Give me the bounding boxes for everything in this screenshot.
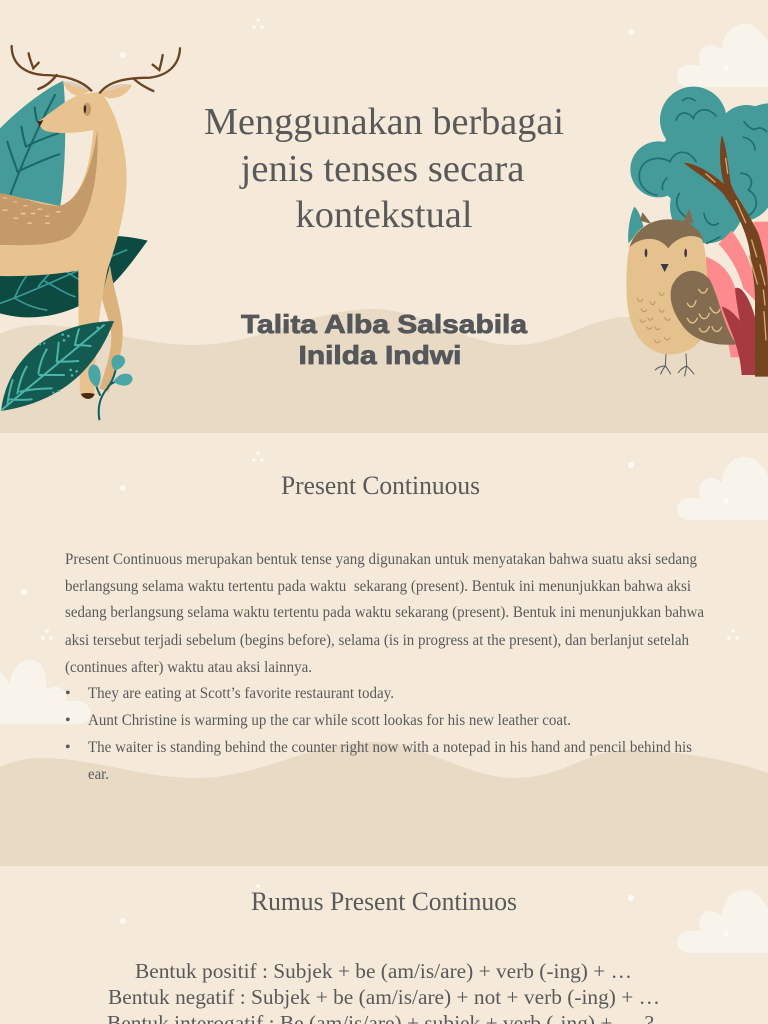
deer nose	[37, 120, 43, 127]
cloud: slide 1 right	[677, 24, 768, 87]
authors: Talita Alba Salsabila	[241, 309, 528, 339]
illustration: tree and owl	[626, 87, 768, 377]
text block: definition: (continues after) waktu atau aksi lainnya.	[65, 659, 312, 676]
pink plant	[706, 222, 768, 357]
owl legs	[655, 353, 694, 376]
icon: front leaf	[1, 321, 114, 411]
text block: definition	[65, 551, 704, 676]
deer eye	[83, 103, 91, 116]
text block: formulas: Bentuk negatif : Subjek + be (am/is/are) + not + verb (-ing) + …	[108, 985, 660, 1009]
owl feathers	[687, 288, 722, 332]
text block: example bullets: ear.	[88, 766, 109, 783]
text block: example bullets: They are eating at Scott’s favorite restaurant today.	[88, 685, 394, 702]
owl wing	[671, 271, 737, 345]
deer body	[0, 92, 127, 393]
text block: example bullets	[65, 685, 692, 783]
authors: Inilda Indwi	[298, 340, 462, 370]
cloud: slide 3 right	[677, 890, 768, 953]
title: jenis tenses secara	[238, 148, 525, 190]
text block: definition: Present Continuous merupakan bentuk tense yang digunakan untuk menyatakan bahwa suatu aksi sedang	[65, 551, 697, 568]
title: kontekstual	[296, 194, 472, 236]
tree foliage	[628, 87, 768, 243]
cloud: slide 2 right	[677, 457, 768, 520]
hill: slide 1	[0, 309, 768, 433]
deer hoof	[81, 393, 95, 399]
deer antlers	[12, 46, 180, 93]
illustration: deer with leaves	[0, 46, 180, 419]
heading: Rumus Present Continuos: Rumus Present Continuos	[251, 886, 517, 916]
title	[204, 101, 564, 236]
red plant	[722, 288, 760, 375]
icon: teal leaf	[0, 81, 65, 208]
icon: dark leaf	[0, 236, 148, 317]
title: Menggunakan berbagai	[204, 101, 564, 143]
text block: example bullets: •	[65, 712, 71, 729]
authors	[241, 309, 528, 370]
cloud: slide 2 left	[0, 660, 91, 724]
hill: slide 2	[0, 742, 768, 866]
text block: example bullets: Aunt Christine is warming up the car while scott lookas for his new leather coat.	[88, 712, 571, 729]
owl ear tufts	[640, 208, 693, 224]
text block: definition: aksi tersebut terjadi sebelum (begins before), selama (is in progress at the present), dan berlanjut setelah	[65, 632, 689, 649]
text block: example bullets: •	[65, 685, 71, 702]
deer back leg	[99, 265, 123, 392]
text block: example bullets: The waiter is standing behind the counter right now with a notepad in his hand and pencil behind his	[88, 739, 692, 756]
text block: example bullets: •	[65, 739, 71, 756]
deer saddle and spots	[0, 130, 98, 245]
owl body	[626, 219, 709, 354]
owl eyes and beak	[645, 249, 687, 272]
deer ears	[63, 81, 132, 98]
owl head cap	[629, 219, 704, 248]
text block: formulas: Bentuk positif : Subjek + be (am/is/are) + verb (-ing) + …	[135, 959, 632, 983]
icon: small sprig	[88, 355, 133, 419]
heading: Present Continuous: Present Continuous	[281, 470, 480, 500]
foliage line details	[639, 98, 767, 243]
text block: definition: sedang berlangsung selama waktu tertentu pada waktu sekarang (present). Bentuk ini menunjukkan bahwa	[65, 604, 704, 621]
tree trunk	[683, 135, 768, 377]
text block: definition: berlangsung selama waktu tertentu pada waktu sekarang (present). Bentuk ini menunjukkan bahwa aksi	[65, 578, 692, 595]
text block: formulas	[107, 959, 660, 1024]
